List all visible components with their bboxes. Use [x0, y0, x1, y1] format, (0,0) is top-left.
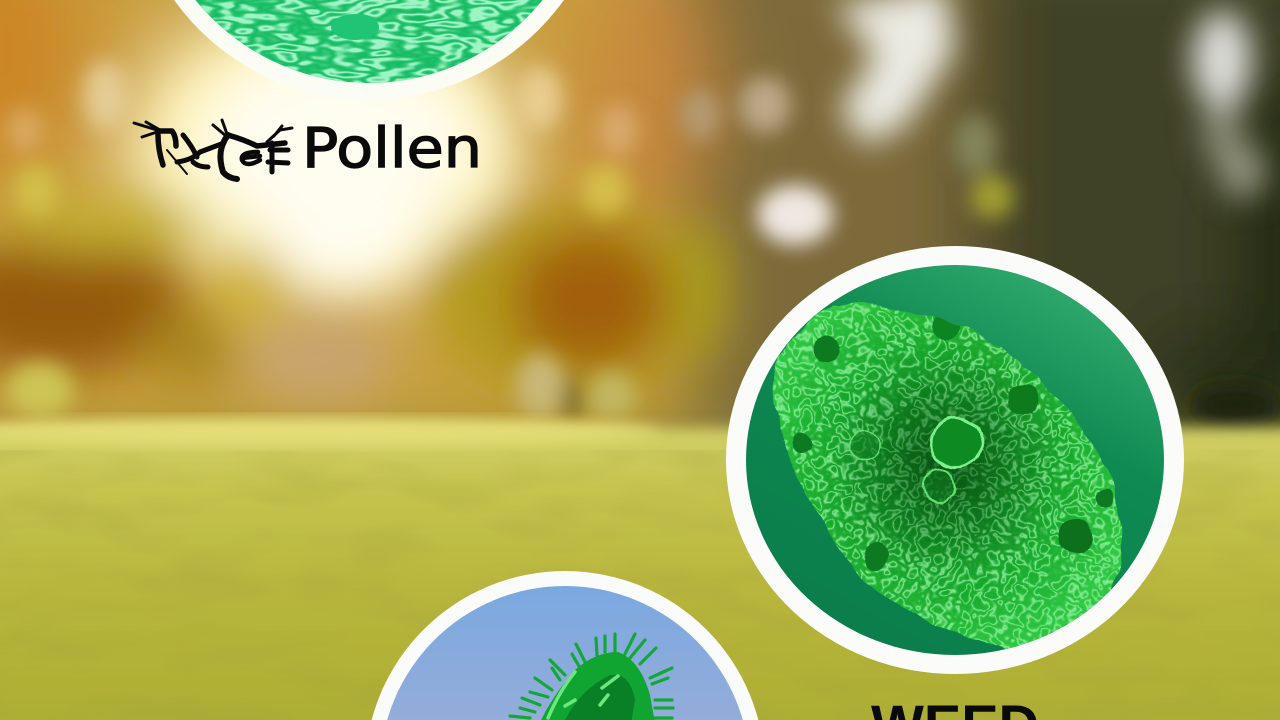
- heading: garbled branching mark and Pollen label: [134, 116, 482, 180]
- cactus-like pollen circle, cropped at bottom: [365, 571, 765, 720]
- pollen grain circle, cropped at top: [129, 0, 609, 100]
- illegible antler-like mark: [134, 120, 292, 179]
- Pollen label: Pollen: [302, 116, 482, 180]
- spiky green cell: [510, 634, 673, 720]
- green pollen cell: [772, 302, 1122, 650]
- weed pollen circle: [726, 246, 1184, 674]
